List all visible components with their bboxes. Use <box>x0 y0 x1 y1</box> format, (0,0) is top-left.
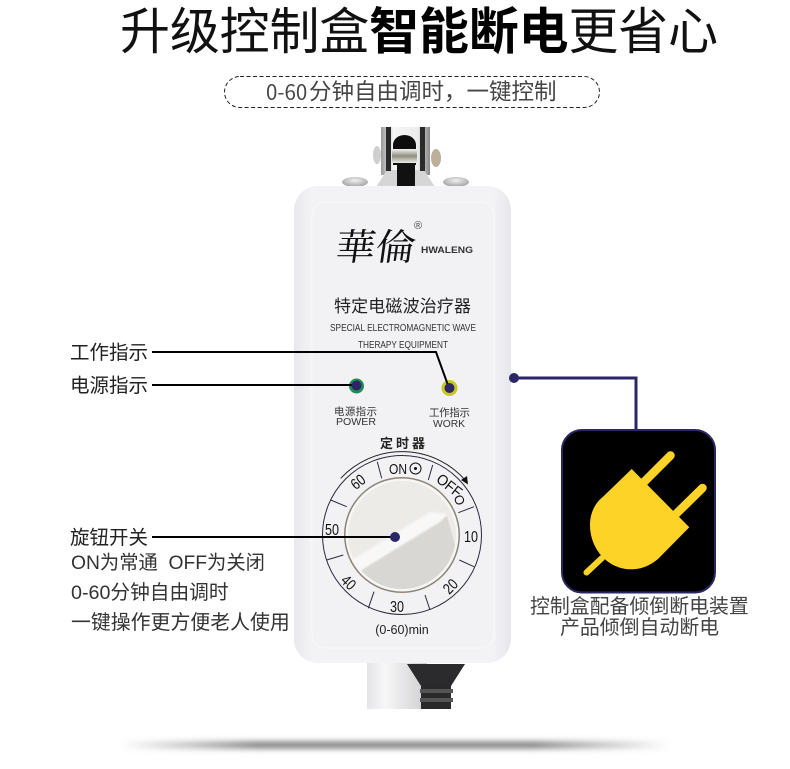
timer dial: 20 <box>440 576 462 598</box>
timer dial: ON <box>389 461 407 478</box>
rotary switch description: ON为常通 OFF为关闭 <box>71 552 265 574</box>
brand logo: HWALENG <box>421 245 473 256</box>
subtitle pill: 分钟自由调时，一键控制 <box>309 74 557 106</box>
work indicator <box>429 380 470 430</box>
rotary switch description: 一键操作更方便老人使用 <box>71 611 290 634</box>
power indicator: POWER <box>336 416 376 428</box>
connector to plug icon <box>509 373 636 431</box>
label: rotary switch <box>70 527 400 549</box>
title: 升级控制盒智能断电更省心 <box>120 4 718 60</box>
icon: plug <box>562 430 715 592</box>
cable neck and strain relief <box>367 663 465 709</box>
label: work indicator <box>70 342 454 393</box>
timer dial: 40 <box>337 572 359 594</box>
timer dial: (0-60)min <box>375 623 429 637</box>
caption: tip-over cutoff: 控制盒配备倾倒断电装置 <box>530 595 749 618</box>
subtitle pill: 0-60 <box>266 76 307 106</box>
power indicator <box>334 378 377 428</box>
brand logo: ® <box>414 220 422 232</box>
subtitle pill <box>224 74 600 108</box>
timer heading: 定时器 <box>380 436 425 451</box>
dial knob <box>344 477 460 593</box>
product name: 特定电磁波治疗器 <box>334 297 471 316</box>
timer dial: 10 <box>464 529 478 546</box>
brand logo <box>333 220 473 269</box>
box body <box>294 186 511 663</box>
power indicator: 电源指示 <box>334 405 377 418</box>
clamp on top of the box <box>342 127 469 187</box>
caption: tip-over cutoff: 产品倾倒自动断电 <box>560 616 719 639</box>
control box product photo <box>294 127 511 709</box>
timer dial: OFF <box>433 471 465 501</box>
timer dial: 50 <box>325 522 339 539</box>
caption: tip-over cutoff <box>530 595 749 639</box>
rotary switch description: 0-60分钟自由调时 <box>71 582 229 604</box>
floor shadow <box>120 742 670 748</box>
box inner panel <box>312 202 494 648</box>
label: power indicator <box>70 375 362 397</box>
timer dial: 30 <box>390 599 404 616</box>
brand logo: 華倫 <box>333 227 419 269</box>
label: power indicator: 电源指示 <box>70 375 148 397</box>
timer dial: O <box>451 492 468 508</box>
work indicator: WORK <box>433 418 465 430</box>
work indicator: 工作指示 <box>429 406 470 419</box>
product name <box>330 297 476 351</box>
label: rotary switch: 旋钮开关 <box>70 527 148 549</box>
timer dial <box>322 452 482 637</box>
product name: SPECIAL ELECTROMAGNETIC WAVE <box>330 323 476 334</box>
timer dial: 60 <box>348 471 369 494</box>
label: work indicator: 工作指示 <box>70 342 148 364</box>
rotary switch description <box>71 552 290 634</box>
product name: THERAPY EQUIPMENT <box>358 340 448 351</box>
